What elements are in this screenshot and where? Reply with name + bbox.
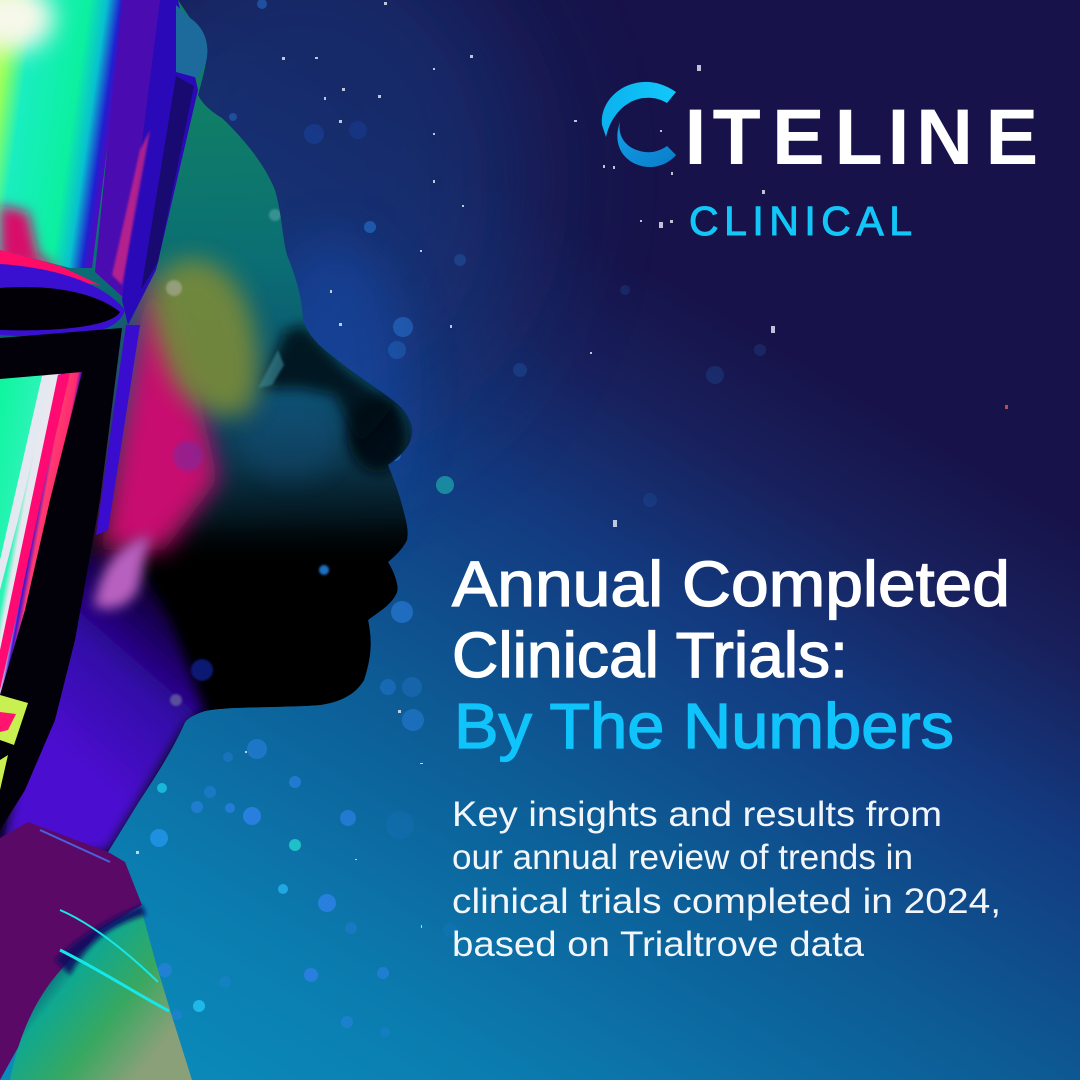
visor highlight [0,0,54,52]
description text: clinical trials completed in 2024, [452,882,1001,921]
glitch fragment [0,695,28,790]
visor lower panel [0,372,82,695]
figure: profile portrait with holographic visor [0,0,430,1080]
violet visor band [95,0,176,300]
logo wordmark: ITELINE [684,92,1038,181]
collar dark shadow [55,905,146,975]
blue visor edge [122,0,198,325]
title: Clinical Trials: [452,619,848,691]
face and neck silhouette [0,0,430,870]
logo: Citeline [602,82,1038,244]
visor stripes [141,76,194,290]
visor dark slot [0,264,125,337]
shoulder green [10,912,192,1080]
visor rim bump [176,5,207,78]
eye highlight [258,350,284,388]
visor upper panel [0,0,126,268]
magenta stripe [0,373,70,690]
glow behind profile [265,240,405,540]
description text [452,795,1001,964]
black frame [0,328,122,830]
white stripe [0,375,52,590]
pink stripe [0,250,100,285]
shoulder garment [0,822,142,1080]
visor pink reflection [0,205,62,270]
description text: based on Trialtrove data [452,925,865,964]
title: By The Numbers [454,690,954,762]
bokeh particles [150,0,766,1037]
pink sliver [112,130,150,285]
logo subtitle: CLINICAL [689,198,912,244]
white star particles [136,2,1008,928]
description text: our annual review of trends in [452,838,913,877]
violet frame stripe [96,325,140,535]
title: Annual Completed [452,548,1010,620]
cyan collar lines [40,830,169,1011]
glitch pink [0,712,16,732]
logo C mark [602,82,676,167]
slot interior [0,287,120,330]
title [452,548,1010,762]
background glow upper left [70,0,530,440]
description text: Key insights and results from [452,795,942,834]
